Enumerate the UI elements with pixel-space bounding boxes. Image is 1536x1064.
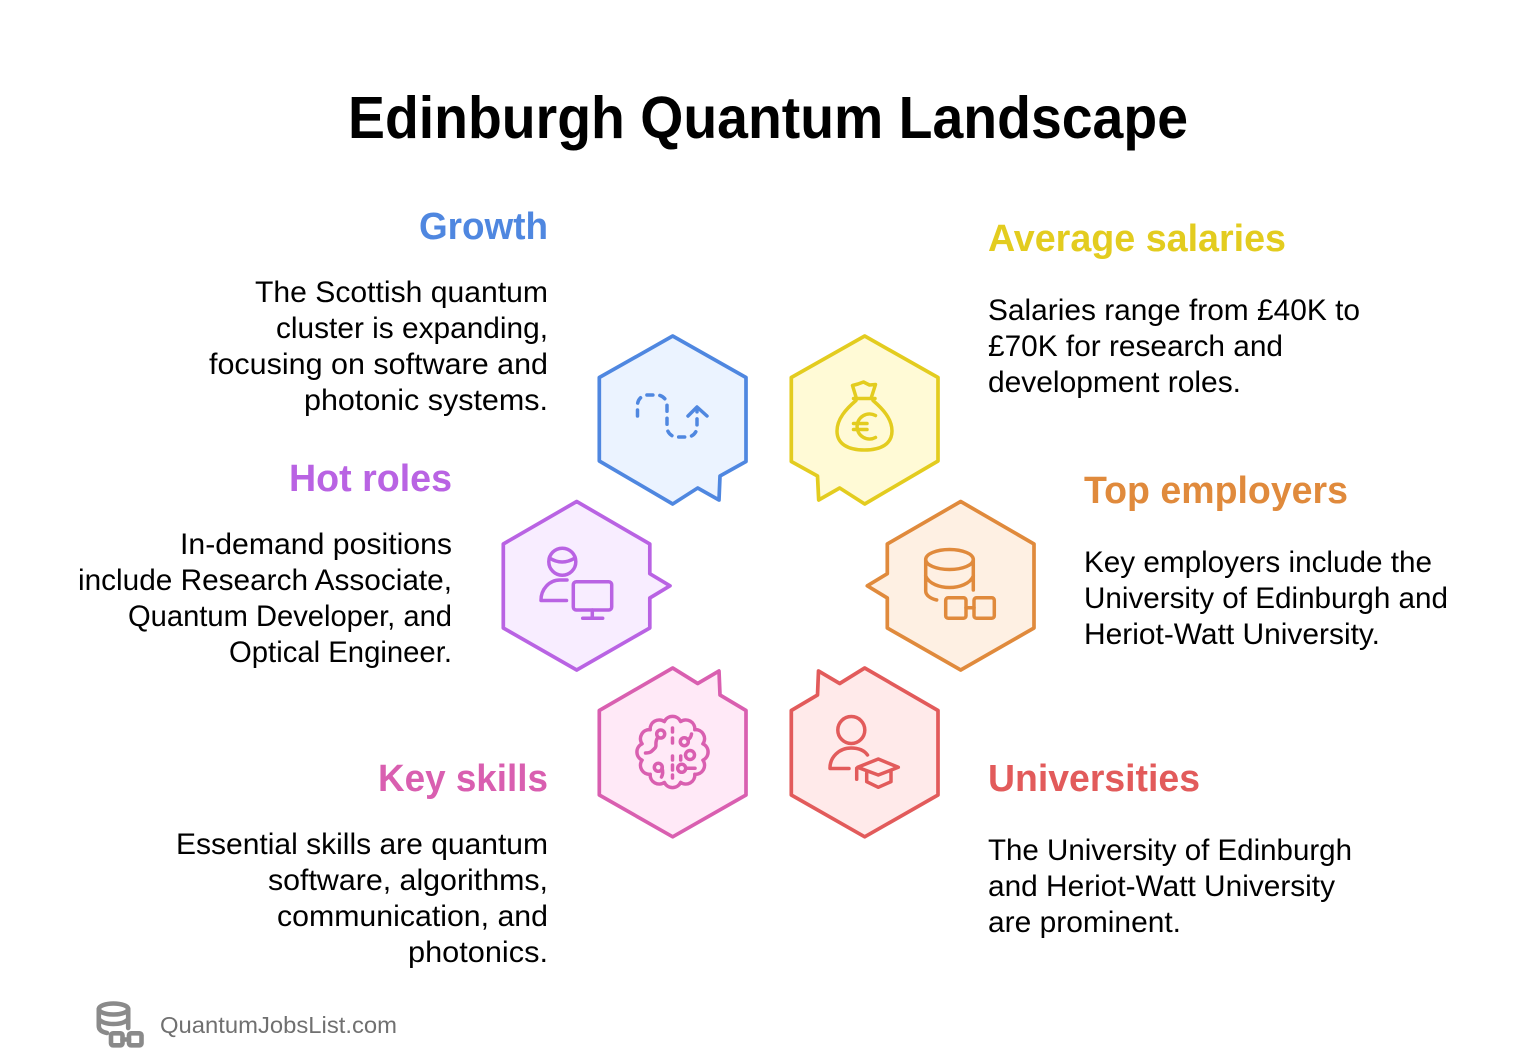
text block: top employers: Heriot-Watt University. [1084,618,1380,651]
text block: top employers: Key employers include the [1084,546,1432,579]
panel: universities text [988,758,1352,939]
icon: footer database logo [99,1004,142,1045]
heading: top employers: Top employers [1084,470,1348,512]
title: Edinburgh Quantum Landscape [348,85,1188,151]
icon: database with linked boxes [926,550,994,618]
text block: average salaries: £70K for research and [988,330,1283,363]
text block: growth: focusing on software and [209,348,548,381]
text block: top employers: University of Edinburgh and [1084,582,1448,615]
text block: growth: The Scottish quantum [255,276,548,309]
hexagon: universities [791,668,938,837]
text block: universities: are prominent. [988,906,1181,939]
text block: average salaries: Salaries range from £40K to [988,294,1360,327]
panel: average salaries text [988,218,1360,399]
text block: hot roles: In-demand positions [180,528,452,561]
heading: growth: Growth [419,206,548,248]
text block: hot roles: Optical Engineer. [229,636,452,669]
heading: average salaries: Average salaries [988,218,1286,260]
text block: key skills: photonics. [408,936,548,969]
hexagon: hot roles [503,502,670,670]
hexagon: growth [599,336,746,504]
text block: key skills: communication, and [277,900,548,933]
hexagon: average salaries [791,336,938,504]
text block: universities: and Heriot-Watt University [988,870,1335,903]
heading: key skills: Key skills [378,758,548,800]
icon: dashed path with arrow [638,395,707,437]
text block: hot roles: Quantum Developer, and [128,600,452,633]
hexagon: top employers [867,502,1034,670]
icon: person at monitor [541,548,612,618]
text block: average salaries: development roles. [988,366,1241,399]
footer: brand [99,1004,397,1045]
panel: key skills text [176,758,548,969]
text block: key skills: Essential skills are quantum [176,828,548,861]
icon: euro money bag [837,382,892,450]
text block: growth: photonic systems. [304,384,548,417]
hexagon: key skills [599,668,746,837]
text block: growth [209,276,548,417]
text block: average salaries [988,294,1360,399]
panel: hot roles text [78,458,452,669]
panel: top employers text [1084,470,1448,651]
text block: key skills [176,828,548,969]
text block: universities: The University of Edinburgh [988,834,1352,867]
text block: top employers [1084,546,1448,651]
footer text: QuantumJobsList.com [160,1012,397,1038]
icon: brain circuit [637,716,708,788]
heading: hot roles: Hot roles [289,458,452,500]
text block: key skills: software, algorithms, [268,864,548,897]
text block: hot roles [78,528,452,669]
text block: growth: cluster is expanding, [276,312,548,345]
heading: universities: Universities [988,758,1200,800]
panel: growth text [209,206,548,417]
icon: graduate [830,716,898,787]
text block: universities [988,834,1352,939]
text block: hot roles: include Research Associate, [78,564,452,597]
